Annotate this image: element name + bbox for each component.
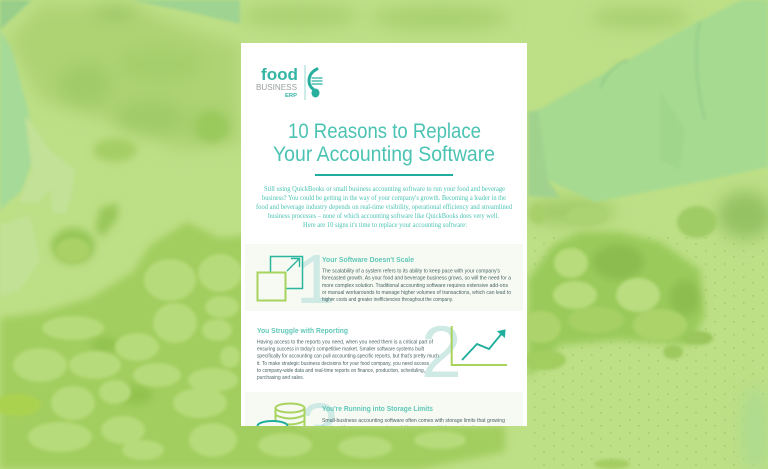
intro paragraph — [256, 185, 512, 229]
individual sprout highlights — [0, 204, 717, 469]
section 1 body: higher costs and greater inefficiencies throughout the company. — [322, 297, 453, 303]
section 2 body: it. To make strategic business decisions for your food company, you need access — [257, 361, 429, 367]
section 2 heading: You Struggle with Reporting — [257, 326, 348, 335]
number 1: 1 — [296, 240, 335, 318]
title — [273, 120, 495, 166]
section 1 heading: Your Software Doesn't Scale — [322, 255, 414, 264]
logo: Food Business ERP — [256, 65, 322, 100]
section 1 body: or manual workarounds to manage higher volumes of transactions, which can lead to — [322, 290, 511, 296]
icon: line chart — [452, 326, 507, 365]
number 3: 3 — [300, 389, 339, 467]
section 2: struggle with reporting — [257, 326, 507, 380]
section 1: software doesn't scale — [245, 244, 523, 311]
intro paragraph: food and beverage industry depends on real-time visibility, operational efficiency and streamlined — [256, 203, 512, 211]
section 3: storage limits — [245, 392, 523, 426]
title: Your Accounting Software — [273, 143, 495, 166]
document card — [241, 43, 527, 467]
logo wordmark: ERP — [285, 93, 297, 99]
intro paragraph: business? You could be getting in the way of your company's growth. Becoming a leader in the — [262, 194, 506, 202]
section 2 body: specifically for accounting can pull accounting-specific reports, but that's pretty much — [257, 354, 439, 360]
section 3 heading: You're Running into Storage Limits — [322, 404, 433, 413]
sleeves and hand — [0, 0, 768, 297]
section 2 body: purchasing and sales. — [257, 375, 304, 381]
section 2 body: ensuring success in today's competitive market. Smaller software systems built — [257, 346, 424, 352]
number 2: 2 — [421, 312, 462, 393]
section 2 body — [257, 340, 439, 381]
section 3 band — [245, 392, 523, 426]
section 3 body: Small-business accounting software often comes with storage limits that growing — [322, 418, 505, 424]
logo wordmark — [256, 68, 297, 97]
logo divider — [304, 65, 306, 100]
logo wordmark: food — [261, 66, 298, 84]
intro paragraph: Still using QuickBooks or small business accounting software to run your food and beverage — [264, 185, 505, 193]
section 2 body: Having access to the reports you need, when you need them is a critical part of — [257, 340, 433, 346]
title: 10 Reasons to Replace — [288, 120, 481, 143]
logo wordmark: BUSINESS — [256, 82, 297, 92]
section 1 body: more complex solution. Traditional accounting software requires extensive add-ons — [322, 283, 508, 289]
icon: storage stack — [256, 402, 306, 426]
section 1 body: The scalability of a system refers to its ability to keep pace with your company's — [322, 268, 500, 274]
section 1 body: forecasted growth. As your food and beverage business grows, so will the need for a — [322, 276, 512, 282]
icon: leaf and fork — [309, 69, 322, 98]
icon: scaling squares — [258, 256, 302, 300]
intro paragraph: Here are 10 signs it's time to replace your accounting software: — [303, 221, 467, 229]
section 2 body: to company-wide data and real-time reports on finance, production, scheduling, — [257, 368, 425, 374]
title divider — [315, 174, 453, 176]
intro paragraph: business processes – none of which accounting software like QuickBooks does very well. — [268, 212, 499, 220]
section 1 band — [245, 244, 523, 311]
section 1 body — [322, 268, 512, 303]
section 3 body: food and beverage companies quickly outgrow, which can slow the system — [322, 426, 497, 432]
sprout masses — [0, 112, 705, 469]
